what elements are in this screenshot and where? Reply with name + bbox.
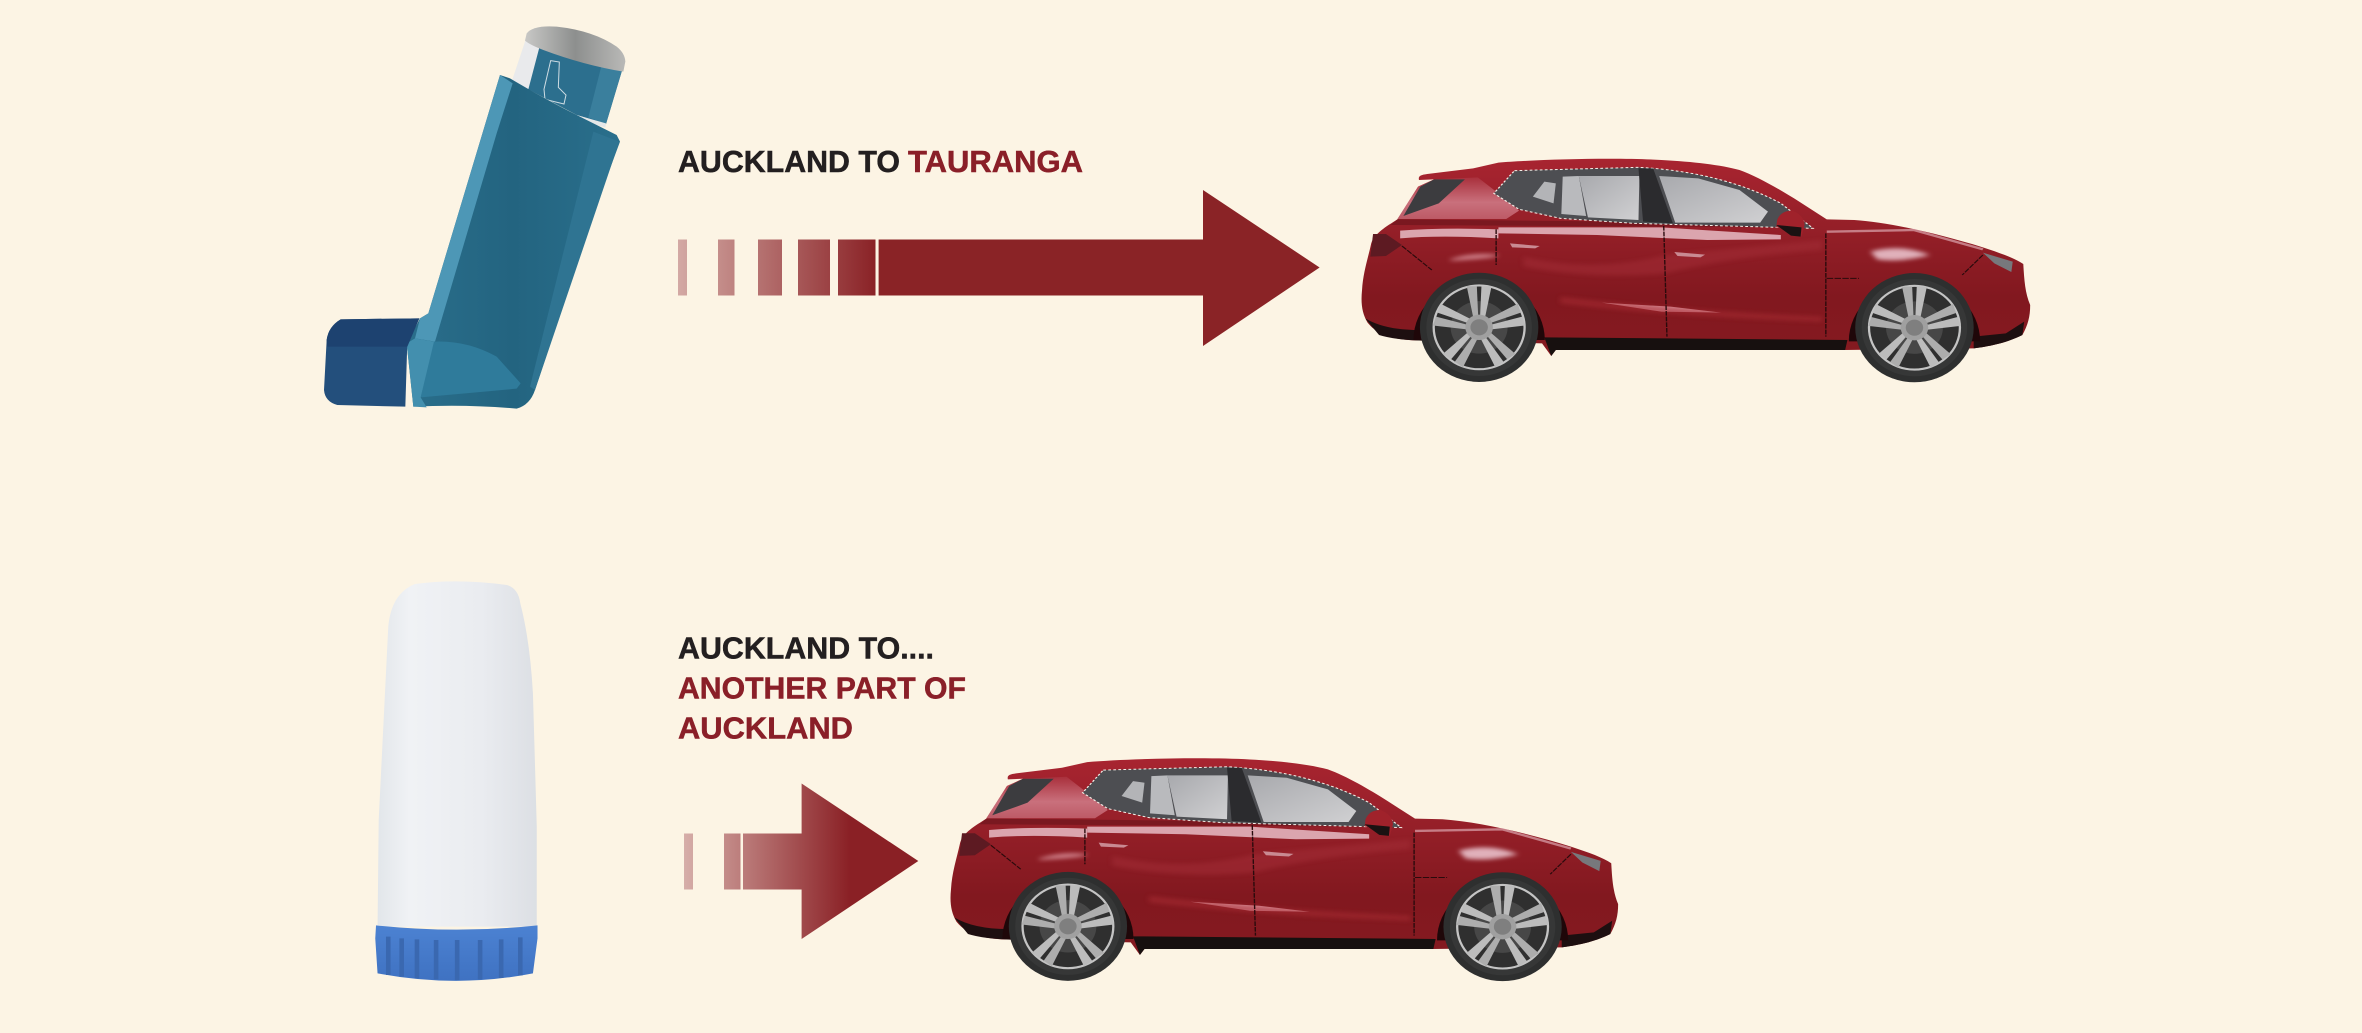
inhaler dark mouthpiece	[324, 318, 419, 407]
car rear wheel	[1420, 273, 1538, 382]
icon: white dry-powder inhaler	[375, 581, 538, 981]
icon: red car, top	[1362, 159, 2030, 382]
car rear window	[1403, 179, 1465, 216]
car tail light	[1370, 234, 1402, 257]
car lower trim	[1544, 337, 1847, 356]
car shoulder shadow	[1391, 219, 1799, 227]
heading: Auckland to another part of Auckland	[678, 630, 966, 746]
heading: Auckland to another part of Auckland: AUCKLAND	[678, 710, 853, 746]
heading: Auckland to Tauranga: TAURANGA	[908, 144, 1083, 179]
car door lines and handles	[1402, 226, 1983, 337]
car rear quarter panel	[1397, 177, 1519, 219]
heading: Auckland to another part of Auckland: AUCKLAND TO....	[678, 630, 934, 666]
icon: blue metered-dose inhaler	[324, 26, 625, 409]
heading: Auckland to another part of Auckland: ANOTHER PART OF	[678, 670, 966, 706]
heading: Auckland to Tauranga	[678, 144, 1083, 179]
arrow: long distance	[678, 190, 1320, 346]
inhaler canister sleeve	[512, 37, 623, 127]
car side windows	[1494, 167, 1813, 228]
inhaler right edge	[530, 132, 619, 390]
car front wheel	[1855, 273, 1974, 382]
car headlight	[1983, 253, 2013, 272]
icon: red car, bottom	[951, 758, 1618, 981]
car highlights	[1400, 227, 1983, 322]
white inhaler body	[378, 581, 537, 927]
inhaler main body	[407, 75, 620, 409]
car wheel arches	[1413, 280, 1980, 341]
inhaler foot facet	[421, 342, 521, 397]
inhaler light side panel	[415, 75, 513, 342]
inhaler canister metal top	[525, 26, 625, 72]
heading: Auckland to Tauranga: AUCKLAND TO	[678, 144, 900, 179]
car body	[1362, 159, 2030, 356]
car mirror	[1776, 211, 1805, 237]
white inhaler blue cap	[375, 925, 538, 981]
arrow: short distance	[684, 784, 918, 939]
